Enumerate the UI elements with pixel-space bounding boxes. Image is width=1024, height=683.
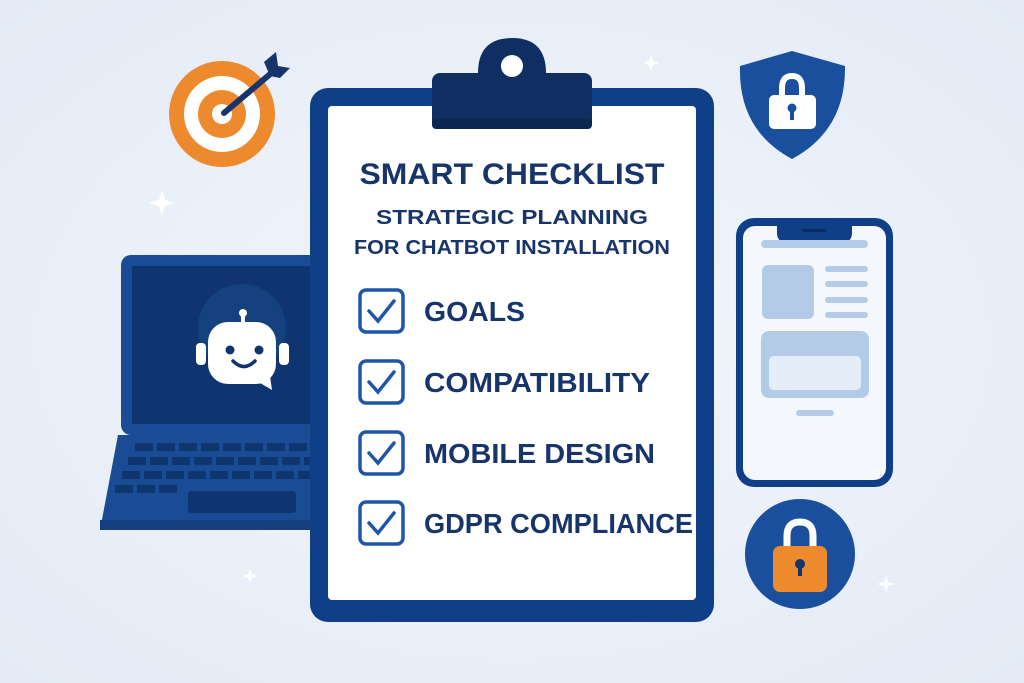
icon: round lock — [745, 499, 855, 609]
item: compatibility — [360, 361, 650, 403]
icon: shield lock — [740, 51, 845, 159]
laptop — [100, 255, 336, 530]
item: gdpr — [360, 502, 693, 544]
subtitle: FOR CHATBOT INSTALLATION — [354, 237, 670, 259]
phone — [736, 218, 893, 487]
icon: robot — [196, 309, 289, 390]
item: mobile design: MOBILE DESIGN — [424, 438, 655, 469]
item: goals — [360, 290, 525, 332]
checklist items — [360, 290, 693, 544]
title: SMART CHECKLIST — [360, 158, 664, 191]
clipboard — [310, 38, 714, 622]
icon: sparkles — [149, 55, 895, 593]
item: compatibility: COMPATIBILITY — [424, 367, 650, 398]
subtitle: STRATEGIC PLANNING — [376, 207, 648, 229]
item: gdpr: GDPR COMPLIANCE — [424, 508, 693, 539]
clip — [432, 38, 592, 129]
item: goals: GOALS — [424, 296, 525, 327]
icon: target — [169, 52, 290, 167]
subtitle — [354, 207, 670, 259]
item: mobile design — [360, 432, 655, 474]
